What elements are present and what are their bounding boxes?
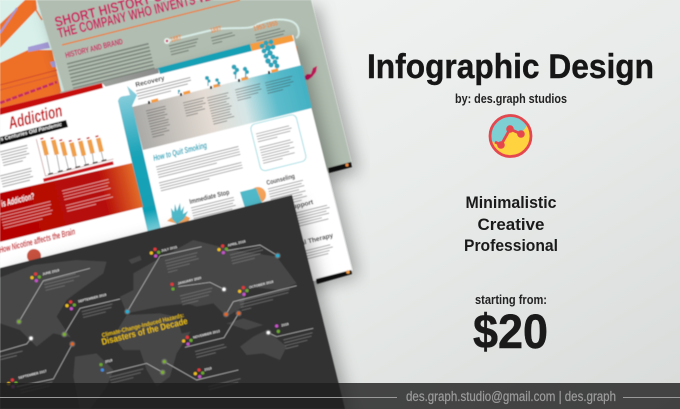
footer bar: des.graph.studio@gmail.com | des.graph bbox=[406, 389, 616, 404]
history paragraph bbox=[67, 44, 155, 88]
panel: nicotine addiction page bbox=[0, 83, 161, 272]
timeline: 1953-1955 bbox=[253, 20, 279, 33]
magenta map splat bbox=[302, 66, 317, 80]
collage of infographic pages bbox=[0, 0, 352, 409]
event labels: JANUARY 2020 bbox=[177, 276, 202, 286]
callout box bbox=[250, 114, 307, 172]
heading: counseling: Counseling bbox=[266, 173, 296, 187]
event labels: OCTOBER 2018 bbox=[249, 280, 274, 290]
heading: recovery: Recovery bbox=[135, 75, 166, 89]
gradient recovery band bbox=[132, 65, 312, 150]
panel: quit smoking page bbox=[60, 35, 352, 320]
event labels: JULY 2015 bbox=[161, 245, 178, 253]
panel: vending machine history page bbox=[37, 0, 352, 173]
recovery stages: plants and cigarettes bbox=[148, 40, 280, 104]
therapy text bbox=[305, 244, 334, 259]
qualities list: Creative bbox=[478, 216, 544, 234]
panel: orange and mint artwork page bbox=[0, 0, 70, 125]
byline: by: des.graph studios bbox=[455, 92, 567, 106]
heading: oral therapy: Oral Therapy bbox=[293, 232, 334, 249]
map title: Disasters of the Decade bbox=[100, 316, 189, 347]
top colour strip bbox=[60, 35, 294, 99]
timeline: 1887 bbox=[170, 34, 182, 44]
event labels: SEPTEMBER 2017 bbox=[18, 369, 47, 380]
heading: immediate stop: Immediate Stop bbox=[189, 189, 230, 206]
counseling text bbox=[268, 180, 308, 207]
heading: how to quit smoking: How to Quit Smoking bbox=[152, 140, 208, 163]
event labels: JUNE 2019 bbox=[42, 268, 60, 276]
timeline: 1897 bbox=[210, 25, 222, 35]
footer tag bbox=[316, 270, 352, 284]
recovery columns text bbox=[146, 76, 295, 137]
quit smoking paragraphs bbox=[156, 146, 243, 191]
icon: des.graph logo bbox=[490, 114, 531, 156]
black subtitle banner: s Centuries Old Pandemic bbox=[0, 122, 63, 143]
red top strip bbox=[0, 83, 103, 115]
event labels: NOVEMBER 2013 bbox=[193, 329, 220, 340]
starting from label: starting from: bbox=[475, 293, 547, 307]
hazard pin clusters bbox=[7, 244, 280, 388]
end markers bbox=[16, 253, 281, 375]
timeline bbox=[164, 19, 299, 55]
title: addiction: Addiction bbox=[6, 101, 64, 133]
footer tag bbox=[328, 162, 352, 173]
support text bbox=[296, 205, 332, 226]
arrow bbox=[118, 86, 161, 233]
continents bbox=[0, 240, 297, 409]
world map and annotations bbox=[0, 239, 315, 409]
event labels: APRIL 2018 bbox=[227, 239, 246, 248]
price: $20 bbox=[473, 306, 548, 359]
orange fragment bbox=[295, 46, 298, 54]
footer bar bbox=[0, 383, 680, 409]
title: short history bbox=[53, 0, 242, 41]
red gradient block bbox=[0, 163, 143, 242]
event labels: SEPTEMBER 2019 bbox=[78, 293, 107, 304]
immediate stop text bbox=[191, 197, 237, 221]
recovery paragraph bbox=[136, 77, 192, 99]
bar chart: cigarettes bbox=[33, 122, 115, 182]
qualities list bbox=[464, 194, 558, 255]
icon: counseling bubble bbox=[240, 187, 266, 208]
event labels: 2019 bbox=[204, 366, 212, 372]
event descriptions bbox=[0, 247, 315, 393]
heading: how nicotine affects the brain: How Nicotine affects the Brain bbox=[0, 226, 76, 255]
title: Infographic Design bbox=[367, 48, 654, 86]
event labels: 2019 bbox=[105, 358, 113, 364]
heading: support: Support bbox=[288, 199, 315, 212]
heading: history and brand: HISTORY AND BRAND bbox=[64, 37, 124, 60]
event labels bbox=[18, 239, 289, 380]
connector lines bbox=[0, 245, 313, 387]
map title: Climate-Change-Induced Hazards: bbox=[101, 313, 185, 339]
intro text bbox=[0, 145, 34, 187]
panel: world map disasters page bbox=[0, 195, 345, 409]
icon: brain bbox=[27, 249, 41, 263]
red gradient block: is Addiction? bbox=[0, 191, 36, 209]
qualities list: Minimalistic bbox=[466, 194, 556, 212]
qualities list: Professional bbox=[464, 237, 558, 255]
icon: hand bbox=[167, 203, 190, 226]
event labels: 2019 bbox=[281, 322, 289, 328]
